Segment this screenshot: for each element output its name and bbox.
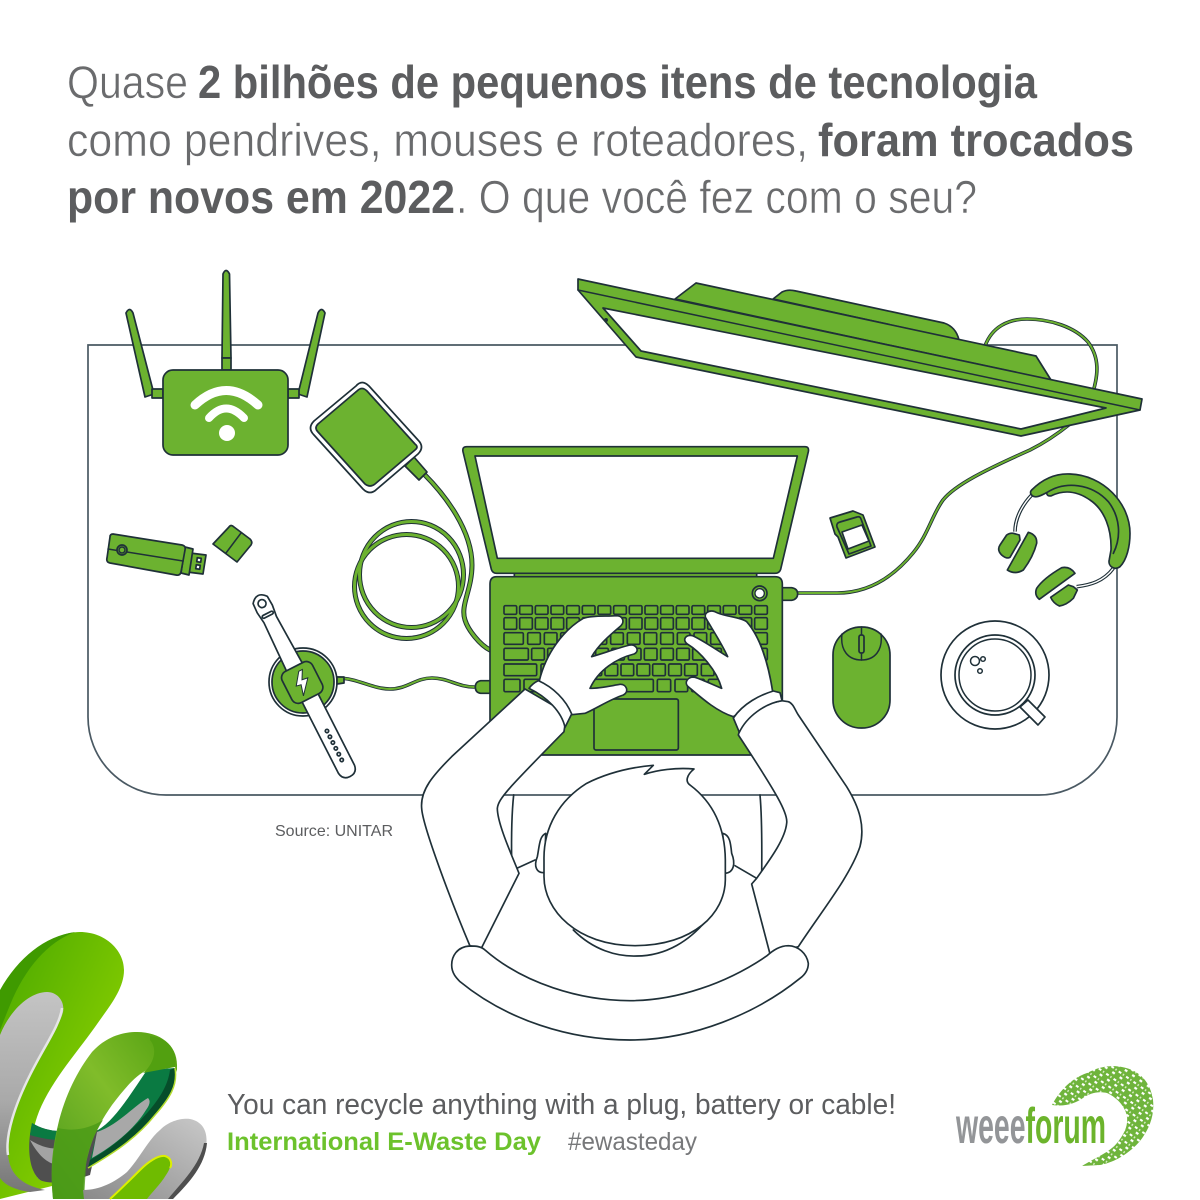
chair back (452, 946, 808, 1040)
keyboard (504, 606, 767, 692)
footer message (227, 1089, 896, 1156)
footer message: You can recycle anything with a plug, battery or cable! (227, 1089, 896, 1121)
wireless charger (269, 648, 474, 716)
headphones (999, 474, 1130, 606)
cable: monitor loop (985, 319, 1097, 392)
external hard drive (310, 382, 490, 650)
title: Quase (67, 56, 188, 108)
title: por novos em 2022 (67, 171, 455, 223)
laptop screen (475, 456, 797, 558)
title: . O que você fez com o seu? (456, 171, 977, 223)
laptop hinge (514, 573, 757, 577)
drive body (310, 382, 422, 492)
laptop connectors (782, 588, 798, 600)
watch face (279, 659, 325, 706)
antennas (222, 270, 231, 358)
left ear cup (999, 532, 1037, 572)
cable: laptop to monitor (797, 424, 1070, 593)
right hand (685, 611, 773, 717)
router (126, 270, 325, 455)
headphone wires (1015, 495, 1113, 587)
coffee cup (941, 621, 1049, 729)
mouse (833, 627, 890, 728)
head (544, 765, 725, 946)
cup handle (1020, 700, 1045, 725)
footer message: #ewasteday (568, 1128, 697, 1156)
usb cap (213, 526, 252, 562)
title: 2 bilhões de pequenos itens de tecnologia (198, 56, 1037, 108)
usb stick (107, 534, 206, 575)
smartwatch (243, 588, 365, 784)
monitor screen (603, 308, 1106, 429)
router body (163, 370, 288, 455)
monitor stand hump (773, 290, 959, 340)
monitor back panel (675, 283, 1051, 380)
wifi symbol (195, 390, 258, 405)
neck and shoulders (517, 860, 535, 868)
front green ribbon (52, 1032, 177, 1199)
laptop base (490, 577, 782, 755)
logo wordmark: weeeforum (955, 1098, 1106, 1154)
hands (529, 611, 782, 732)
swirl logo (0, 932, 207, 1199)
monitor front frame (578, 279, 1142, 436)
logo swoosh (1052, 1066, 1153, 1166)
touchpad (594, 699, 678, 750)
person (422, 689, 862, 1040)
big green ribbon (0, 932, 124, 1199)
headband (1031, 474, 1130, 568)
coiled cable (354, 522, 464, 638)
lightning bolt (291, 669, 314, 697)
inner dark band (29, 1123, 100, 1182)
left hand (539, 616, 637, 715)
left ear (536, 833, 546, 873)
laptop (463, 447, 809, 755)
title: como pendrives, mouses e roteadores, (67, 114, 808, 166)
footer message: International E-Waste Day (227, 1128, 541, 1156)
power button (752, 586, 767, 601)
source: Source: UNITAR (275, 823, 393, 840)
charger cable (337, 678, 474, 689)
sd card (830, 511, 875, 558)
lime inner ribbon (110, 1156, 170, 1199)
weeeforum logo (955, 1066, 1153, 1166)
right ear (723, 833, 734, 873)
laptop screen frame (463, 447, 809, 573)
gray ribbon (0, 992, 63, 1192)
right arm (738, 701, 862, 954)
drive cable (424, 474, 490, 650)
torso (482, 796, 770, 1000)
left arm (422, 689, 567, 948)
back ribbon inner (88, 1068, 176, 1168)
left cuff (529, 681, 572, 727)
title (67, 56, 1134, 223)
right cuff (733, 691, 782, 732)
strap (250, 591, 358, 781)
monitor (578, 279, 1142, 436)
title: foram trocados (818, 114, 1134, 166)
desk (88, 345, 1117, 795)
right ear cup (1036, 567, 1077, 606)
collar (573, 920, 707, 956)
lower gray ribbon (83, 1119, 207, 1199)
